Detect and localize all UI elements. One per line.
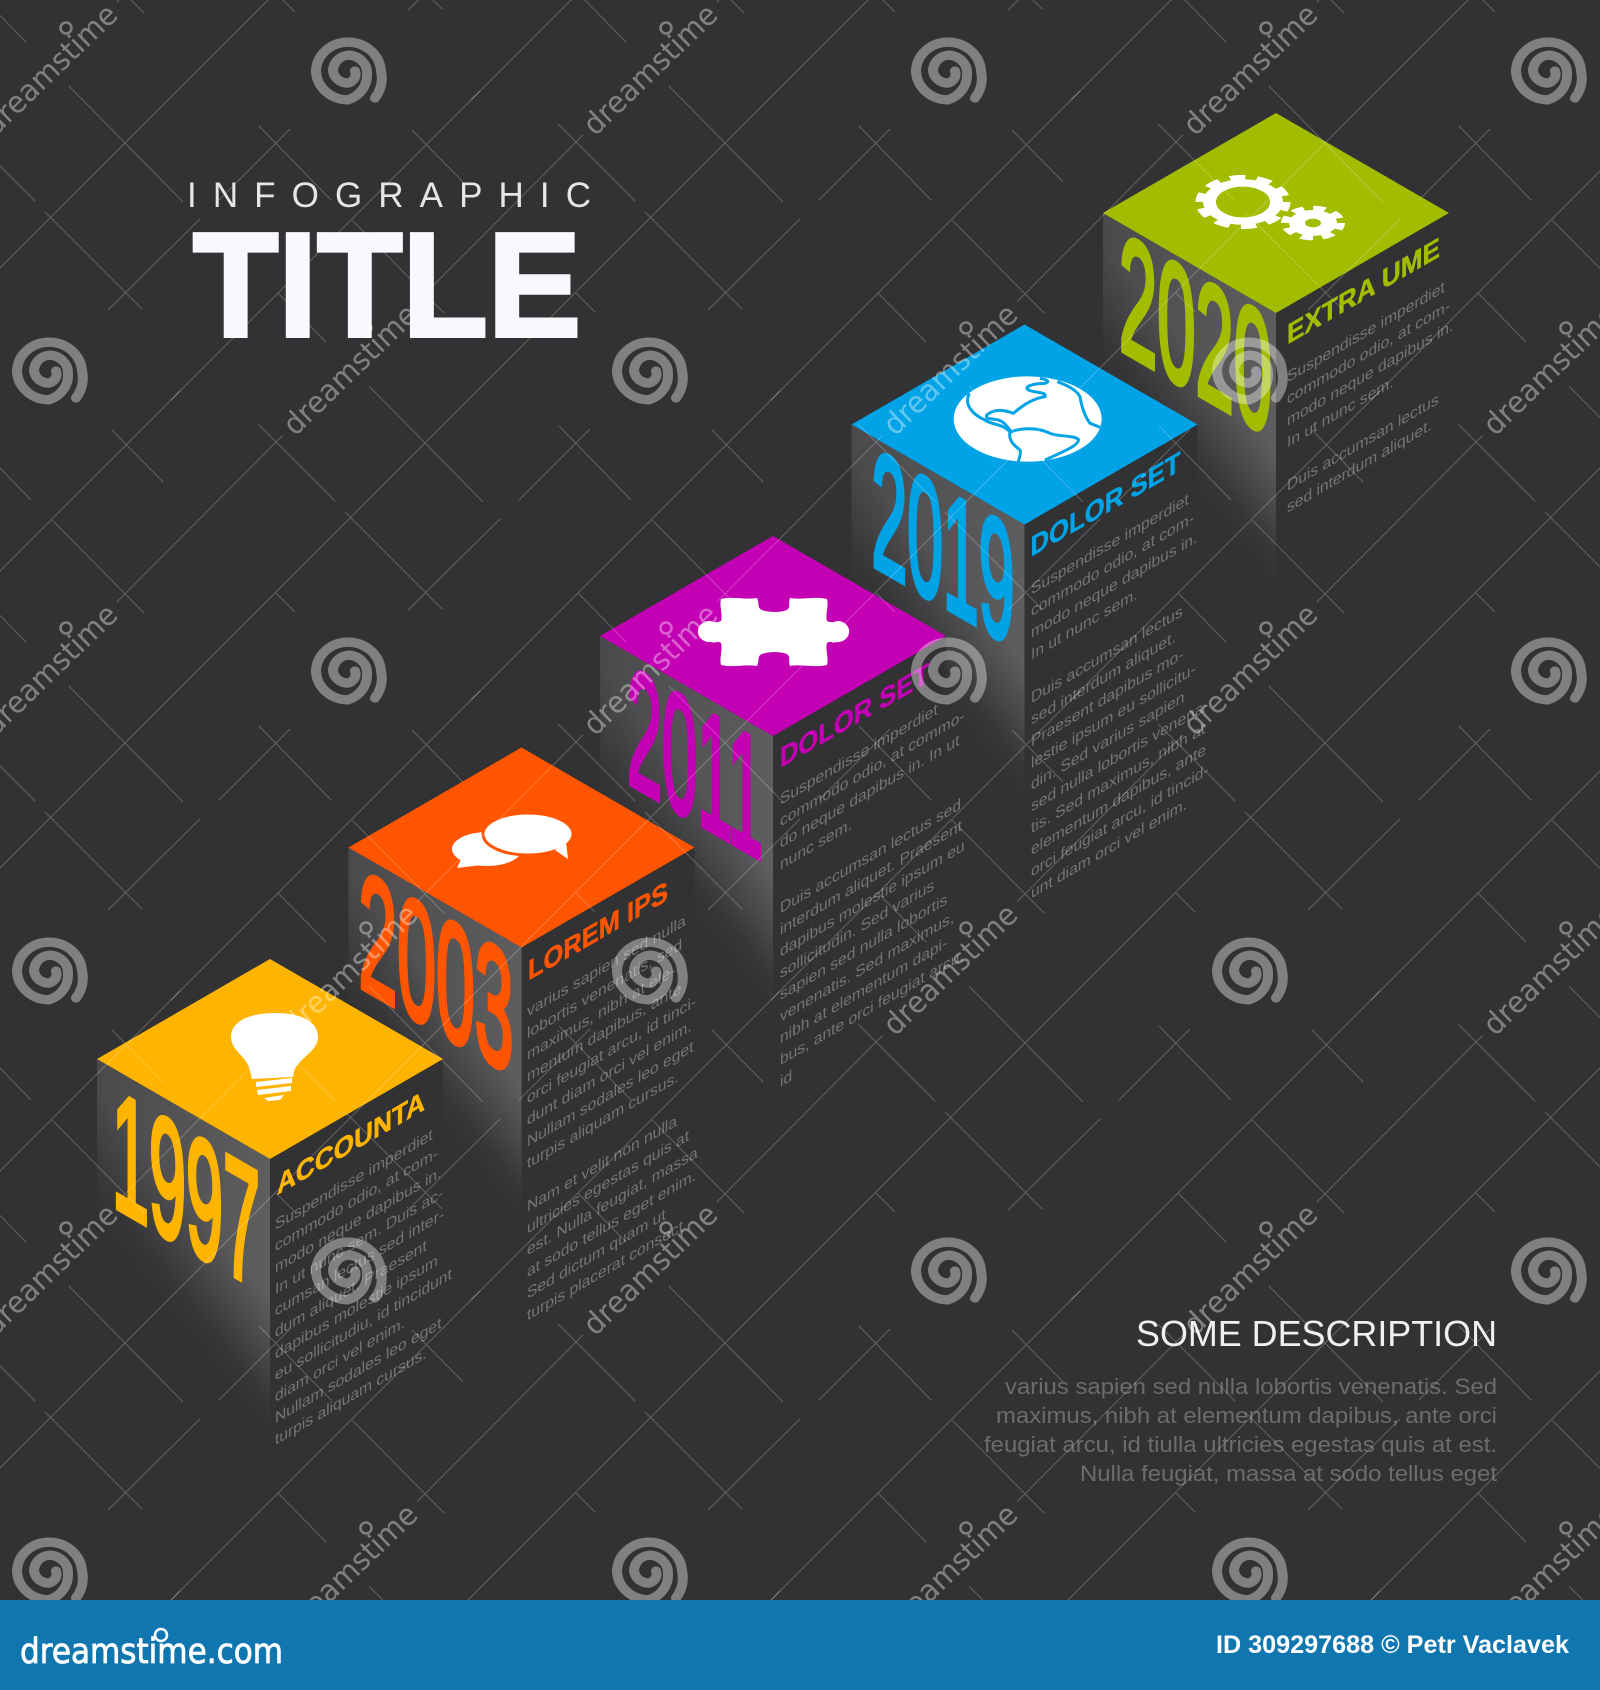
body text 2019: din. Sed varius sapien bbox=[1031, 687, 1184, 794]
body text 2011: nunc sem. bbox=[780, 815, 852, 874]
body text 2011: commodo odio, at commo- bbox=[780, 706, 965, 830]
description text: Nulla feugiat, massa at sodo tellus eget bbox=[1080, 1461, 1497, 1486]
heading dolor set: DOLOR SET bbox=[780, 658, 929, 774]
body text 2003: Nullam sodales leo eget bbox=[527, 1037, 694, 1151]
left face 2011 bbox=[600, 615, 773, 1016]
top face 2003 bbox=[348, 748, 694, 948]
body text 2020: commodo odio, at com- bbox=[1287, 296, 1450, 408]
body text 2019: orci feugiat arcu, id tincid- bbox=[1031, 760, 1209, 881]
top face 2020 bbox=[1103, 113, 1449, 313]
right face 2019 bbox=[1024, 418, 1209, 924]
body text 1997: commodo odio, at com- bbox=[275, 1144, 438, 1255]
body text 2003: lobortis venenatis, sed bbox=[527, 935, 682, 1042]
watermark wordmarks: dreamstime bbox=[576, 597, 725, 743]
step 2003: lorem ips: 2003 bbox=[358, 834, 514, 1111]
left face 2019 bbox=[852, 402, 1024, 804]
watermark wordmarks: dreamstime bbox=[276, 297, 425, 443]
watermark wordmarks: dreamstime bbox=[876, 897, 1025, 1043]
left face 2003 bbox=[348, 829, 522, 1227]
right face 2020 bbox=[1276, 210, 1453, 613]
body text 2003: turpis placerat consect bbox=[527, 1216, 683, 1324]
heading extra ume: EXTRA UME bbox=[1287, 232, 1440, 351]
watermark wordmarks: dreamstime bbox=[876, 1497, 1025, 1643]
body text 2019: unt diam orci vel enim. bbox=[1031, 794, 1187, 902]
footer credit: ID 309297688 © Petr Vaclavek bbox=[1216, 1631, 1569, 1659]
body text 1997: Suspendisse imperdiet bbox=[275, 1125, 433, 1234]
body text 2003: Nam et velit non nulla bbox=[527, 1111, 678, 1216]
watermark wordmarks: dreamstime bbox=[876, 297, 1025, 443]
step 2019: dolor set: 2019 bbox=[872, 413, 1014, 683]
body text 1997: In ut nunc sem. Duis ac- bbox=[275, 1184, 443, 1298]
body text 1997: modo neque dapibus in. bbox=[275, 1163, 441, 1277]
watermark wordmarks: dreamstime bbox=[276, 897, 425, 1043]
watermark wordmarks: dreamstime bbox=[1176, 1197, 1325, 1343]
icon: globe bbox=[954, 376, 1102, 463]
body text 1997: turpis aliquam cursus. bbox=[275, 1344, 427, 1449]
watermark wordmarks: dreamstime bbox=[276, 1497, 425, 1643]
body text 2011: id bbox=[780, 1066, 792, 1091]
description heading: SOME DESCRIPTION bbox=[1136, 1313, 1497, 1354]
watermark wordmarks: dreamstime bbox=[576, 1197, 725, 1343]
body text 2011: dapibus molestie ipsum eu bbox=[780, 836, 965, 961]
footer logo text: dreamstime.com bbox=[20, 1632, 283, 1672]
step 2020: extra ume: 2020 bbox=[1119, 197, 1272, 473]
description text: varius sapien sed nulla lobortis venenatis. Sed bbox=[1005, 1374, 1497, 1399]
footer bar bbox=[0, 1600, 1600, 1690]
body text 2003: varius sapien sed nulla bbox=[527, 911, 686, 1021]
body text 2011: do neque dapibus in. In ut bbox=[780, 731, 960, 852]
step 2011: dolor set bbox=[600, 536, 965, 1136]
body text 2003: at sodo tellus eget enim. bbox=[527, 1166, 696, 1281]
step 2011: dolor set: 2011 bbox=[627, 631, 763, 896]
left face 1997 bbox=[97, 1045, 270, 1439]
body text 2020: modo neque dapibus in. bbox=[1287, 316, 1453, 430]
step 2003: lorem ips bbox=[348, 748, 698, 1348]
body text 2019: lestie ipsum eu sollicitu- bbox=[1031, 659, 1196, 772]
body text 2020: Duis accumsan lectus bbox=[1287, 390, 1439, 495]
heading dolor set: DOLOR SET bbox=[1030, 446, 1181, 564]
right face 1997 bbox=[270, 1054, 452, 1559]
body text 2020: sed interdum aliquet. bbox=[1287, 415, 1432, 517]
description text bbox=[984, 1374, 1497, 1486]
body text 2019: commodo odio, at com- bbox=[1031, 508, 1194, 620]
icon: gears bbox=[1201, 178, 1340, 238]
body text 2003: maximus, nibh at ele- bbox=[527, 961, 675, 1064]
body text 2011: venenatis. Sed maximus, bbox=[780, 907, 954, 1026]
body text 2003: turpis aliquam cursus. bbox=[527, 1067, 679, 1172]
body text 2003: ultricies egestas quis at bbox=[527, 1126, 689, 1238]
body text 2011: interdum aliquet. Praesent bbox=[780, 816, 962, 939]
step 2019: dolor set bbox=[852, 324, 1209, 924]
description block bbox=[984, 1313, 1497, 1486]
right face 2011 bbox=[773, 625, 965, 1136]
body text 2011: bus, ante orci feugiat arcu, bbox=[780, 945, 964, 1069]
top face 1997 bbox=[97, 959, 443, 1159]
right face 2003 bbox=[522, 845, 698, 1348]
step 1997: accounta: 1997 bbox=[112, 1054, 260, 1326]
body text 1997: eu sollicitudiu, id tincidunt bbox=[275, 1264, 452, 1384]
title block bbox=[187, 176, 591, 368]
body text 2020: Suspendisse imperdiet bbox=[1287, 277, 1445, 386]
body text 1997: Nullam sodales leo eget bbox=[275, 1313, 442, 1427]
body text 1997: dapibus molestie ipsum bbox=[275, 1251, 438, 1363]
left face 2020 bbox=[1103, 188, 1276, 593]
body text 2019: tis. Sed maximus, nibh at bbox=[1031, 719, 1205, 837]
body text 2019: sed nulla lobortis venena- bbox=[1031, 695, 1209, 815]
body text 1997: diam orci vel enim. bbox=[275, 1313, 405, 1406]
step 1997: accounta bbox=[97, 959, 452, 1559]
heading lorem ips: LOREM IPS bbox=[528, 876, 668, 987]
body text 2011: Suspendisse imperdiet bbox=[780, 700, 938, 809]
body text 2011: Duis accumsan lectus sed bbox=[780, 795, 961, 917]
body text 2019: Praesent dapibus mo- bbox=[1031, 645, 1184, 750]
body text 2019: Suspendisse imperdiet bbox=[1031, 490, 1189, 598]
body text 2003: orci feugiat arcu, id tinci- bbox=[527, 992, 696, 1107]
body text 2011: nibh at elementum dapi- bbox=[780, 933, 947, 1047]
top face 2011 bbox=[600, 536, 946, 736]
description text: maximus, nibh at elementum dapibus, ante orci bbox=[996, 1403, 1497, 1428]
title: infographic kicker: INFOGRAPHIC bbox=[187, 176, 591, 215]
body text 2003: Sed dictum quam ut bbox=[527, 1205, 666, 1303]
title: main heading: TITLE bbox=[193, 203, 581, 368]
icon: puzzle piece bbox=[698, 598, 849, 666]
body text 2019: sed interdum aliquet. bbox=[1031, 627, 1176, 729]
heading accounta: ACCOUNTA bbox=[277, 1085, 425, 1201]
body text 2003: dunt diam orci vel enim. bbox=[527, 1016, 692, 1129]
top face 2019 bbox=[852, 324, 1198, 524]
description text: feugiat arcu, id tiulla ultricies egestas quis at est. bbox=[984, 1432, 1497, 1457]
body text 2020: In ut nunc sem. bbox=[1287, 372, 1394, 451]
icon: chat bubbles bbox=[452, 813, 573, 868]
body text 2019: elementum dapibus, ante bbox=[1031, 740, 1206, 859]
body text 1997: dum aliquet. Praesent bbox=[275, 1236, 427, 1341]
body text 2019: In ut nunc sem. bbox=[1031, 584, 1138, 664]
body text 2011: sollicitudin. Sed varius bbox=[780, 876, 934, 982]
body text 1997: cumsan lectus sed inter- bbox=[275, 1205, 444, 1320]
footer logo spiral bbox=[155, 1629, 167, 1641]
watermark wordmarks: dreamstime bbox=[1176, 597, 1325, 743]
body text 2011: sapien sed nulla lobortis bbox=[780, 890, 947, 1004]
icon: light bulb bbox=[231, 1013, 318, 1101]
body text 2019: modo neque dapibus in. bbox=[1031, 528, 1197, 642]
body text 2003: est. Nulla feugiat, massa bbox=[527, 1143, 698, 1259]
body text 2003: mentum dapibus, ante bbox=[527, 979, 681, 1086]
body text 2019: Duis accumsan lectus bbox=[1031, 602, 1183, 707]
